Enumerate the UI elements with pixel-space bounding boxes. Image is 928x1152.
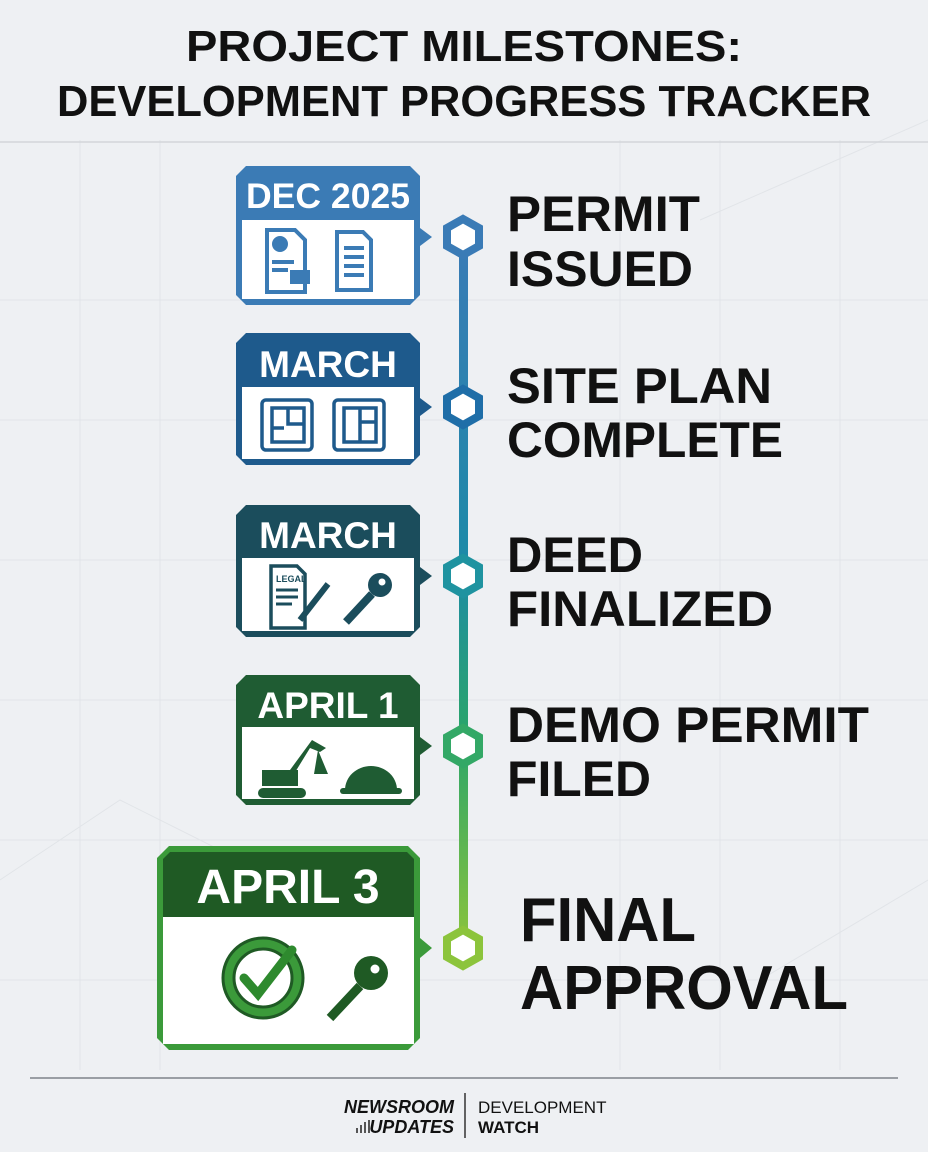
label: final approval [520, 886, 848, 1023]
card: APRIL 3 [157, 846, 432, 1050]
label: final approval: APPROVAL [520, 954, 848, 1023]
card: APRIL 1: APRIL 1 [257, 685, 399, 726]
icon: legal document and key: LEGAL [276, 574, 307, 584]
icon: approval seal [223, 938, 303, 1018]
card: DEC 2025 [236, 166, 432, 305]
footer logo: NEWSROOM [344, 1097, 455, 1117]
card: MARCH site plan [236, 333, 432, 465]
label: deed finalized: FINALIZED [507, 581, 773, 637]
icon: permit document [267, 230, 371, 292]
footer logo: DEVELOPMENT [478, 1098, 606, 1117]
footer logo: UPDATES [369, 1117, 454, 1137]
card: MARCH deed [236, 505, 432, 637]
title: DEVELOPMENT PROGRESS TRACKER [57, 77, 871, 126]
label: permit issued [507, 186, 700, 297]
footer logo [344, 1093, 606, 1138]
icon: legal document and key [271, 566, 392, 628]
label: final approval: FINAL [520, 886, 696, 955]
card: APRIL 1 [236, 675, 432, 805]
card: MARCH deed: MARCH [259, 515, 397, 556]
label: site plan complete: SITE PLAN [507, 358, 772, 414]
title [57, 22, 871, 126]
title: PROJECT MILESTONES: [186, 22, 742, 71]
card: MARCH site plan: MARCH [259, 344, 397, 385]
label: deed finalized: DEED [507, 527, 643, 583]
footer logo: WATCH [478, 1118, 539, 1137]
icon: blueprints [262, 400, 384, 450]
timeline line [459, 237, 468, 948]
card: DEC 2025: DEC 2025 [246, 177, 410, 216]
label: deed finalized [507, 527, 773, 637]
label: demo permit filed: FILED [507, 751, 651, 807]
label: site plan complete [507, 358, 783, 468]
timeline nodes [447, 219, 479, 966]
label: demo permit filed: DEMO PERMIT [507, 697, 869, 753]
label: site plan complete: COMPLETE [507, 412, 783, 468]
label: permit issued: PERMIT [507, 186, 700, 242]
card: APRIL 3: APRIL 3 [196, 861, 380, 914]
label: demo permit filed [507, 697, 869, 807]
icon: excavator and hard hat [258, 740, 402, 798]
label: permit issued: ISSUED [507, 241, 693, 297]
icon: key [330, 956, 388, 1018]
